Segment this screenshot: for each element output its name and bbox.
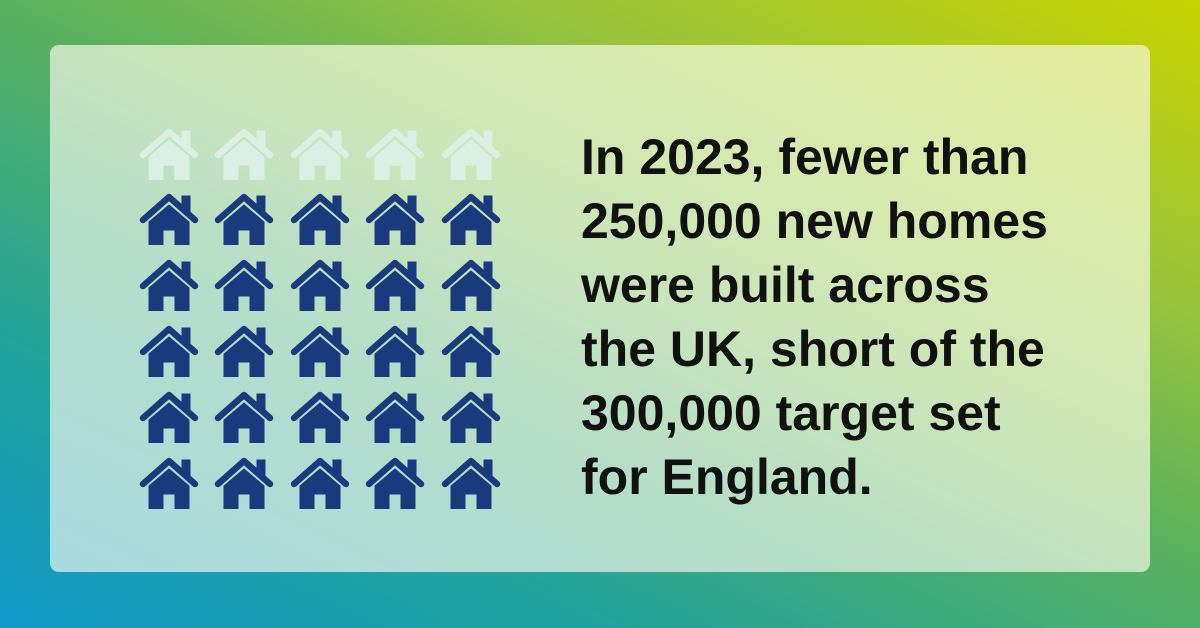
text block: statistic: were built across — [581, 257, 990, 313]
text block: statistic: the UK, short of the — [581, 321, 1045, 377]
icon grid: houses — [140, 128, 500, 509]
text block: statistic: 300,000 target set — [581, 385, 1001, 441]
panel: background card — [50, 45, 1150, 572]
text block: statistic: In 2023, fewer than — [581, 129, 1028, 185]
icon: house row 1 (light) — [140, 128, 500, 180]
icon: house rows 2-6 (dark blue) — [140, 194, 500, 509]
text block: statistic: for England. — [581, 449, 873, 505]
text block: statistic: 250,000 new homes — [581, 193, 1048, 249]
text block: statistic — [580, 129, 1048, 505]
